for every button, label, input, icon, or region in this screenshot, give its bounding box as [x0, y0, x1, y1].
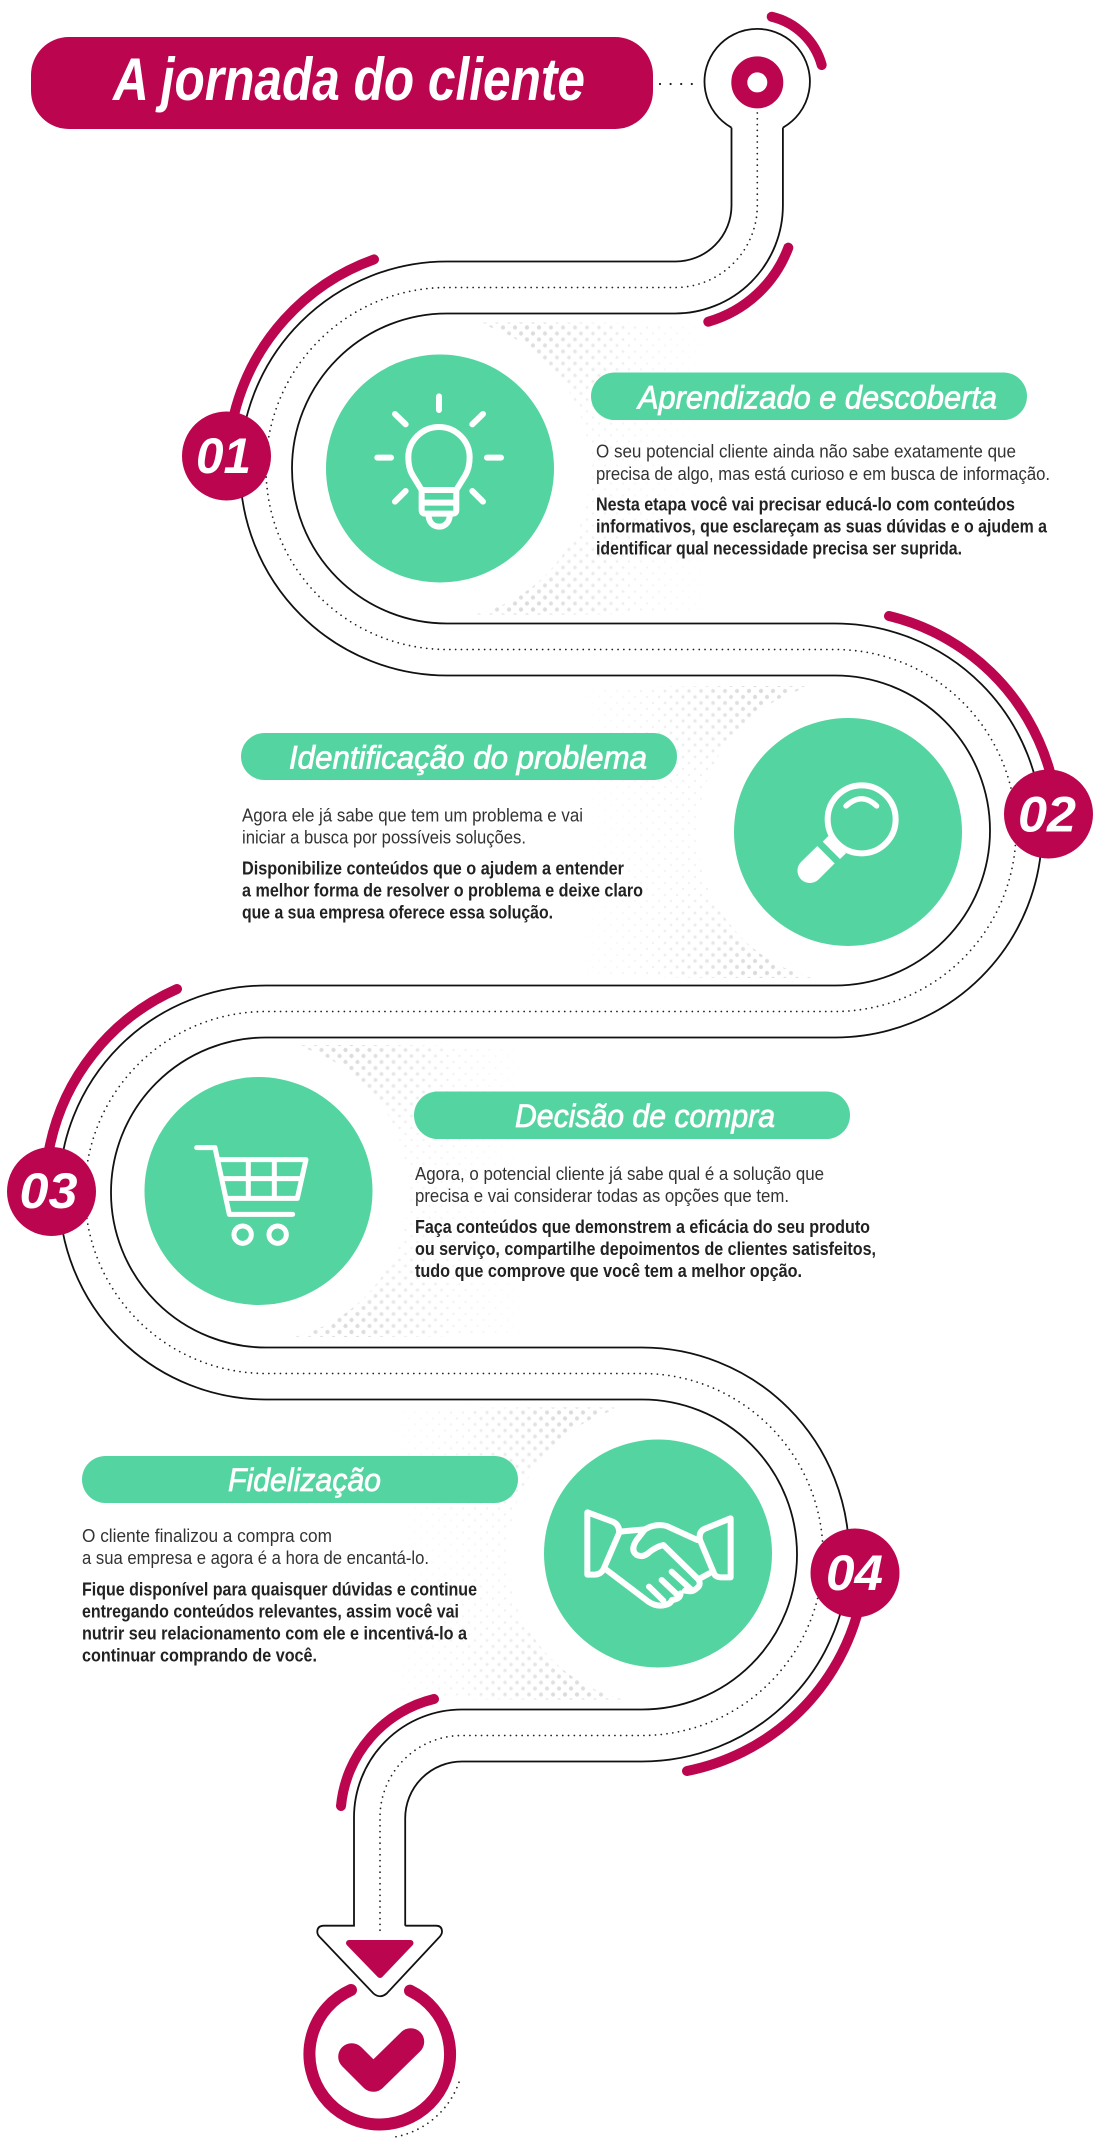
text block 1: identificar qual necessidade precisa ser suprida.: [596, 538, 962, 558]
text block 3: [415, 1164, 876, 1281]
panel: step 1 aprendizado: [182, 259, 1050, 582]
icon circle: shopping cart: [144, 1077, 372, 1305]
number badge 03: [7, 1147, 96, 1236]
text block 1: Nesta etapa você vai precisar educá-lo com conteúdos: [596, 495, 1015, 515]
text block 2: iniciar a busca por possíveis soluções.: [242, 828, 526, 848]
text block 2: que a sua empresa oferece essa solução.: [242, 902, 553, 922]
arc accent 2: [889, 616, 1050, 772]
text block 3: tudo que comprove que você tem a melhor opção.: [415, 1261, 802, 1281]
title banner: [31, 37, 653, 129]
dotted arc under finish icon: [392, 2082, 459, 2138]
icon circle: magnifier: [734, 718, 962, 946]
heading pill 3: [414, 1092, 850, 1139]
text block 1: informativos, que esclareçam as suas dúvidas e o ajudem a: [596, 516, 1048, 536]
finish check icon: [309, 1990, 450, 2124]
heading pill 2: [241, 733, 677, 780]
text block 2: Agora ele já sabe que tem um problema e vai: [242, 806, 583, 826]
text block 3: ou serviço, compartilhe depoimentos de clientes satisfeitos,: [415, 1239, 876, 1259]
halftone backgrounds: [108, 318, 998, 1704]
text block 1: precisa de algo, mas está curioso e em busca de informação.: [596, 464, 1050, 484]
accent arc: last bend: [341, 1699, 434, 1806]
heading pill 4: [82, 1456, 518, 1503]
icon circle: handshake: [544, 1440, 772, 1668]
number badge 04: [810, 1528, 900, 1618]
heading pill 1: Aprendizado e descoberta: [636, 379, 997, 415]
text block 4: entregando conteúdos relevantes, assim você vai: [82, 1602, 459, 1622]
heading pill 4: Fidelização: [228, 1462, 381, 1498]
arrow head triangle: [349, 1943, 410, 1975]
heading pill 3: Decisão de compra: [515, 1098, 775, 1134]
number badge 02: 02: [1018, 786, 1076, 842]
panel: step 3 decisão: [7, 989, 876, 1305]
text block 3: Faça conteúdos que demonstrem a eficácia do seu produto: [415, 1217, 870, 1237]
icon circle: light bulb: [326, 354, 554, 582]
text block 3: precisa e vai considerar todas as opções que tem.: [415, 1186, 789, 1206]
text block 4: Fique disponível para quaisquer dúvidas e continue: [82, 1580, 477, 1600]
accent arc: start top: [772, 17, 822, 65]
panel: step 4 fidelização: [82, 1440, 900, 1771]
text block 1: [596, 442, 1050, 558]
text block 2: [242, 806, 643, 922]
text block 4: a sua empresa e agora é a hora de encantá-lo.: [82, 1548, 429, 1568]
text block 4: O cliente finalizou a compra com: [82, 1526, 332, 1546]
arc accent 4: [687, 1615, 857, 1771]
text block 4: nutrir seu relacionamento com ele e incentivá-lo a: [82, 1624, 468, 1644]
arc accent 3: [49, 989, 177, 1150]
title banner: A jornada do cliente: [111, 46, 585, 113]
number badge 02: [1004, 770, 1093, 858]
heading pill 1: [591, 372, 1027, 420]
heading pill 2: Identificação do problema: [289, 740, 647, 776]
text block 3: Agora, o potencial cliente já sabe qual é a solução que: [415, 1164, 824, 1184]
text block 1: O seu potencial cliente ainda não sabe exatamente que: [596, 442, 1016, 462]
arc accent 1: [234, 259, 374, 415]
number badge 01: 01: [196, 428, 251, 484]
text block 4: continuar comprando de você.: [82, 1646, 317, 1666]
number badge 04: 04: [826, 1545, 883, 1601]
start marker: [739, 64, 775, 100]
accent arc: first bend: [708, 248, 788, 322]
panel: step 2 identificação: [241, 616, 1093, 946]
number badge 03: 03: [20, 1163, 78, 1219]
text block 4: [82, 1526, 477, 1666]
text block 2: Disponibilize conteúdos que o ajudem a entender: [242, 858, 624, 878]
text block 2: a melhor forma de resolver o problema e deixe claro: [242, 880, 643, 900]
connector dots from title to start: [660, 83, 693, 85]
number badge 01: [182, 412, 271, 500]
